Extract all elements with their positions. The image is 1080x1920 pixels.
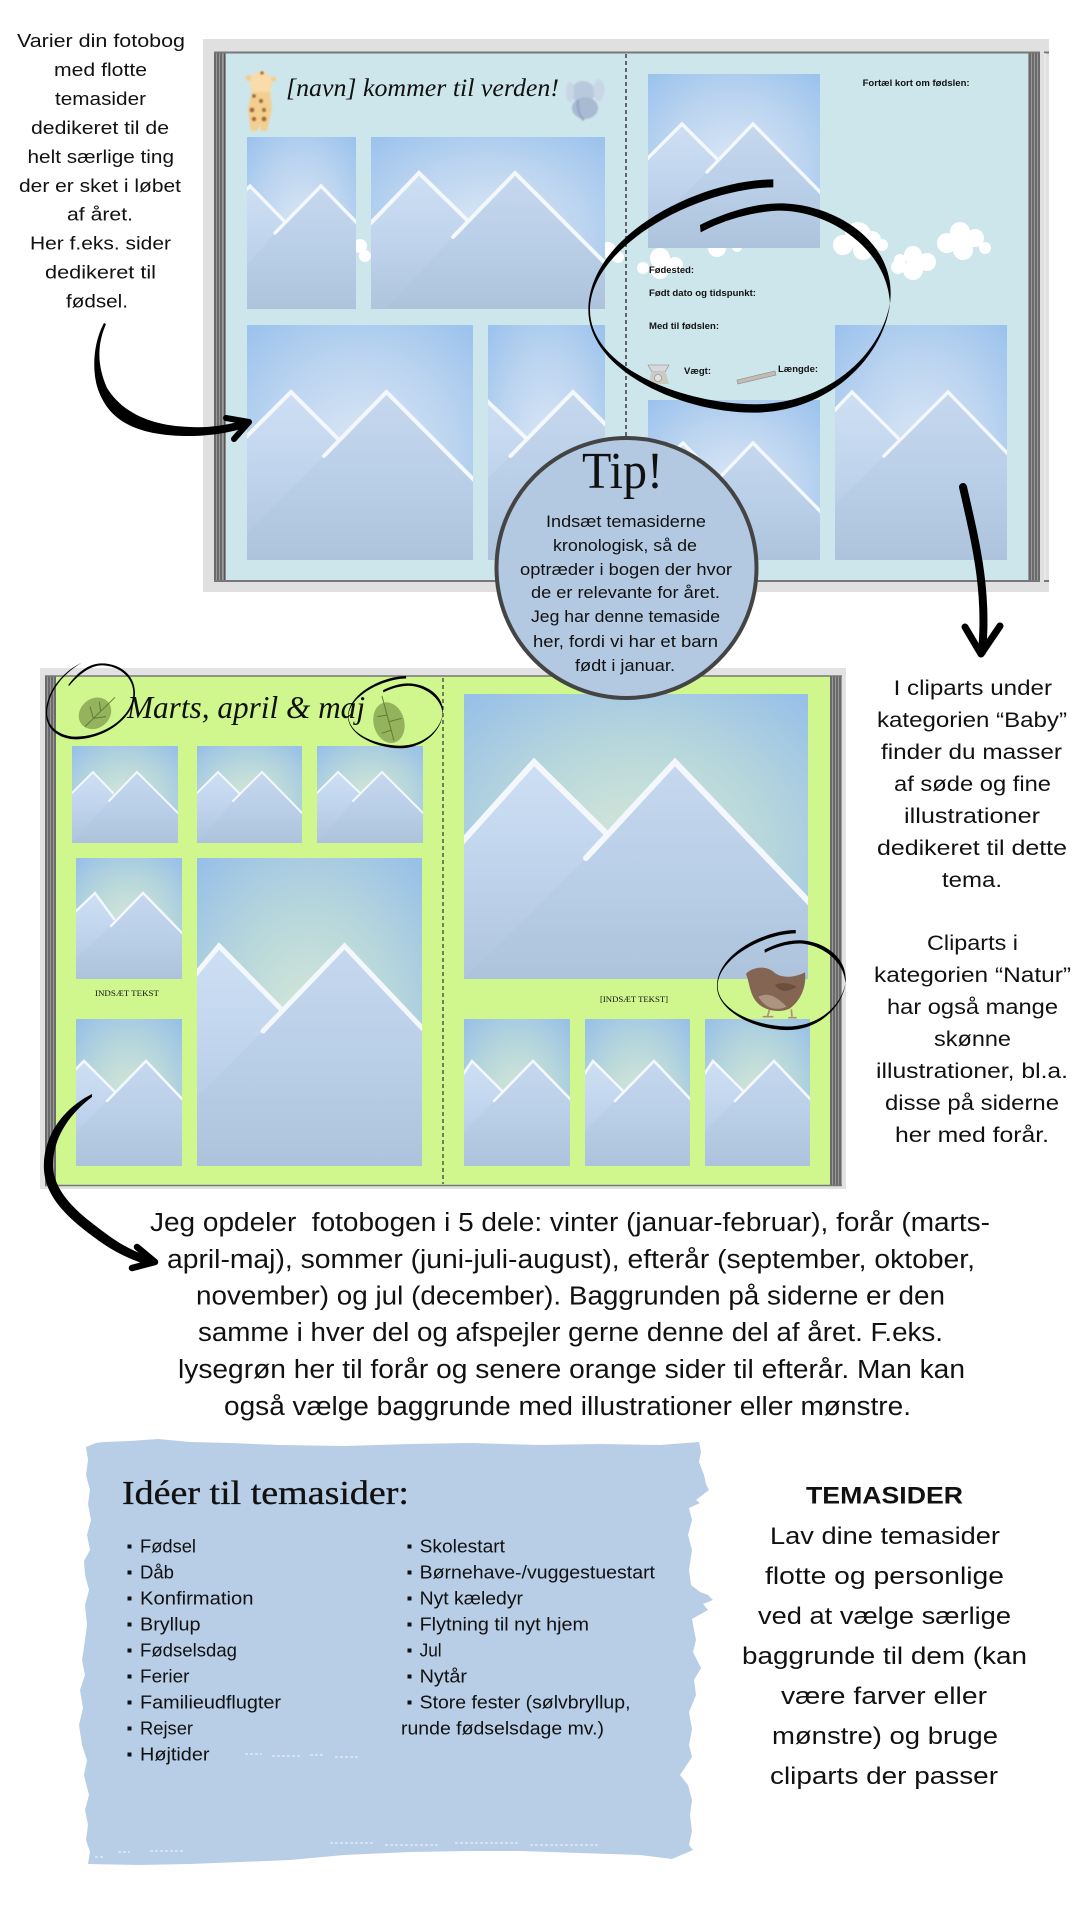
list column 2: Børnehave-/vuggestuestart — [420, 1562, 655, 1582]
list column 2 — [401, 1536, 655, 1738]
photo placeholder a2 — [197, 746, 302, 843]
photo placeholder G — [835, 325, 1007, 560]
text block: temasider: mønstre) og bruge — [772, 1723, 998, 1750]
text block: intro left: fødsel. — [66, 290, 128, 312]
photo placeholder d3 — [705, 1019, 810, 1166]
text block: cliparts: illustrationer, bl.a. — [876, 1060, 1068, 1083]
text block: intro left: med flotte — [54, 59, 147, 80]
arrow: down to cliparts text — [963, 487, 1000, 654]
icon: bird — [746, 968, 805, 1018]
text block: intro left: af året. — [67, 204, 133, 224]
tip body: kronologisk, så de — [553, 536, 697, 555]
text block: paragraph on seasons — [150, 1209, 990, 1421]
form text: Med til fødslen: — [649, 321, 719, 332]
text block: intro left: dedikeret til de — [31, 117, 169, 138]
photo placeholder b2 — [197, 858, 422, 1166]
callout: tip circle — [496, 438, 756, 698]
tip body — [520, 512, 732, 675]
text block: cliparts: har også mange — [887, 996, 1058, 1019]
text block: cliparts: finder du masser — [881, 741, 1062, 764]
text block: intro left: helt særlige ting — [28, 146, 174, 167]
clouds — [353, 222, 991, 280]
text block: temasider: være farver eller — [781, 1683, 987, 1710]
photo placeholder d1 — [464, 1019, 570, 1166]
text block: temasider — [742, 1482, 1027, 1790]
photo placeholder a3 — [317, 746, 423, 843]
photo placeholder D — [488, 325, 605, 560]
dashed spine — [442, 678, 444, 1184]
list column 1: Ferier — [140, 1666, 190, 1686]
form text: Vægt: — [684, 366, 711, 377]
callout swirl: left leaf — [46, 663, 135, 739]
tip body: de er relevante for året. — [531, 583, 720, 602]
panel heading: Idéer til temasider: — [122, 1475, 409, 1512]
text block: cliparts: disse på siderne — [885, 1092, 1059, 1115]
text block: intro left: Varier din fotobog — [17, 30, 185, 51]
list column 1: Højtider — [140, 1744, 210, 1764]
text block: paragraph on seasons: november) og jul (december). Baggrunden på siderne er den — [196, 1282, 945, 1310]
heading: TEMASIDER — [806, 1482, 963, 1510]
caption right: [INDSÆT TEKST] — [600, 994, 668, 1004]
icon: ruler — [737, 371, 776, 384]
panel: spring photobook spread — [40, 663, 846, 1189]
icon: giraffe — [246, 71, 276, 131]
form text: Fødested: — [649, 265, 694, 276]
tip heading: Tip! — [582, 443, 663, 500]
text block: intro left: temasider — [55, 88, 146, 109]
list column 1: Dåb — [140, 1562, 174, 1582]
text block: cliparts: af søde og fine — [894, 773, 1051, 796]
text block: cliparts: kategorien “Baby” — [877, 709, 1067, 732]
text block: paragraph on seasons: også vælge baggrunde med illustrationer eller mønstre. — [224, 1393, 911, 1421]
list column 2: Skolestart — [420, 1536, 505, 1556]
text block: temasider: baggrunde til dem (kan — [742, 1643, 1027, 1670]
list column 2: Jul — [420, 1640, 442, 1660]
photo placeholder E — [648, 74, 820, 248]
panel: ideas brush stroke — [79, 1439, 713, 1865]
callout swirl: form fields — [588, 179, 891, 413]
form text: Født dato og tidspunkt: — [649, 288, 756, 299]
text block: intro left: dedikeret til — [45, 262, 156, 282]
text block: temasider: ved at vælge særlige — [758, 1603, 1011, 1630]
text block: intro left: Her f.eks. sider — [30, 232, 171, 254]
icon: leaf right — [369, 696, 409, 747]
list column 1: Rejser — [140, 1718, 193, 1738]
text block: cliparts: dedikeret til dette — [877, 837, 1067, 860]
tip body: optræder i bogen der hvor — [520, 560, 732, 579]
callout swirl: bird — [717, 930, 846, 1030]
text block: paragraph on seasons: lysegrøn her til forår og senere orange sider til efterår. Man kan — [178, 1356, 965, 1384]
text block: temasider: Lav dine temasider — [770, 1523, 1000, 1550]
text block: cliparts — [874, 677, 1071, 1147]
form text: Fortæl kort om fødslen: — [863, 78, 970, 89]
photo placeholder A — [247, 137, 356, 309]
list column 2: runde fødselsdage mv.) — [401, 1718, 604, 1738]
icon: leaf left — [72, 691, 118, 736]
photo placeholder b3 — [76, 1019, 182, 1166]
dashed spine — [625, 54, 627, 440]
list column 2: Store fester (sølvbryllup, — [420, 1692, 630, 1712]
form text: Længde: — [778, 364, 818, 375]
text block: intro left — [17, 30, 185, 312]
text block: cliparts: her med forår. — [895, 1124, 1049, 1147]
list column 2: Flytning til nyt hjem — [420, 1614, 589, 1634]
photo placeholder a1 — [72, 746, 178, 843]
list column 1: Fødselsdag — [140, 1640, 237, 1660]
page heading: Marts, april & maj — [126, 689, 365, 725]
white brush specks — [95, 1754, 600, 1857]
icon: elephant — [566, 79, 604, 120]
photo placeholder F — [648, 400, 820, 560]
text block: paragraph on seasons: Jeg opdeler fotobogen i 5 dele: vinter (januar-februar), forår (marts- — [150, 1209, 990, 1237]
panel: top photobook spread — [203, 39, 1049, 592]
photo placeholder d2 — [585, 1019, 690, 1166]
list column 1: Konfirmation — [140, 1588, 254, 1608]
list column 1: Fødsel — [140, 1536, 196, 1556]
photo placeholder C — [247, 325, 473, 560]
list column 1: Familieudflugter — [140, 1692, 281, 1712]
tip body: Indsæt temasiderne — [546, 512, 706, 531]
page heading: [navn] kommer til verden! — [286, 75, 559, 102]
photo placeholder c1 — [464, 694, 808, 979]
tip body: født i januar. — [575, 656, 675, 675]
text block: paragraph on seasons: samme i hver del og afspejler gerne denne del af året. F.eks. — [198, 1319, 943, 1347]
text block: cliparts: tema. — [942, 869, 1002, 892]
callout swirl: right leaf — [348, 676, 443, 748]
text block: cliparts: I cliparts under — [894, 677, 1052, 700]
text block: temasider: cliparts der passer — [770, 1763, 998, 1790]
arrow: intro to top spread — [94, 323, 249, 439]
icon: kitchen scale — [648, 365, 669, 384]
text block: cliparts: illustrationer — [904, 805, 1040, 828]
tip body: Jeg har denne temaside — [531, 607, 720, 626]
list column 2: Nyt kæledyr — [420, 1588, 523, 1608]
list column 1 — [128, 1536, 281, 1764]
text block: paragraph on seasons: april-maj), sommer (juni-juli-august), efterår (september, oktober, — [167, 1246, 975, 1274]
caption left: INDSÆT TEKST — [95, 988, 160, 998]
photo placeholder b1 — [76, 858, 182, 979]
form text — [649, 78, 970, 377]
text block: cliparts: kategorien “Natur” — [874, 964, 1071, 987]
list column 1: Bryllup — [140, 1614, 200, 1634]
text block: cliparts: Cliparts i — [927, 932, 1018, 955]
tip body: her, fordi vi har et barn — [533, 632, 718, 651]
text block: temasider: flotte og personlige — [765, 1563, 1004, 1590]
arrow: spread to paragraph — [44, 1094, 155, 1268]
text block: intro left: der er sket i løbet — [19, 175, 181, 196]
text block: cliparts: skønne — [934, 1028, 1011, 1051]
photo placeholder B — [371, 137, 605, 309]
list column 2: Nytår — [420, 1666, 467, 1686]
